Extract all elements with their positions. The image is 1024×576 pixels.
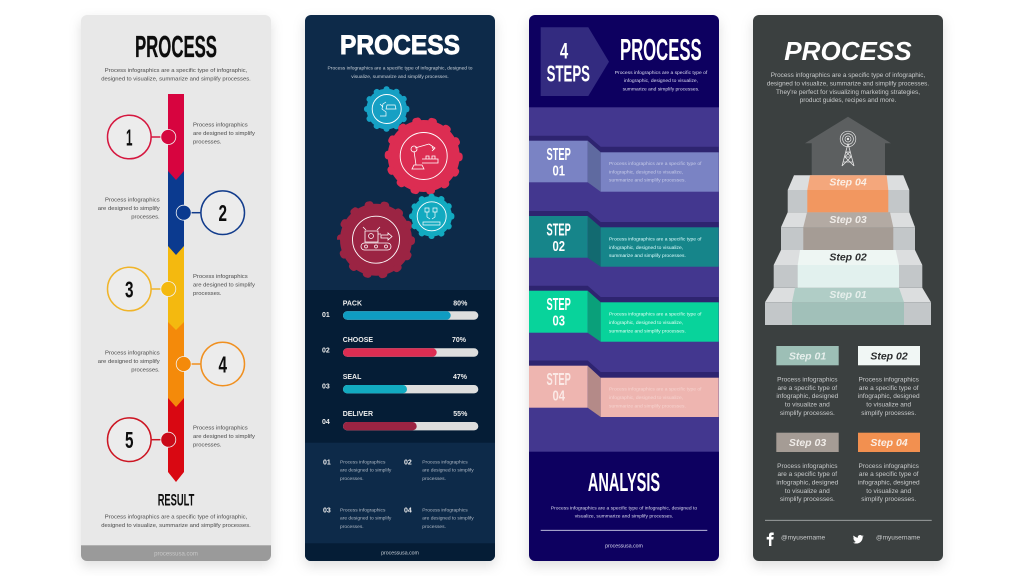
- note 02: 02: [404, 460, 412, 466]
- footer bar: processusa.com: [381, 550, 419, 556]
- progress bars section: [305, 290, 495, 443]
- step 5 marker: [108, 418, 176, 462]
- note 02: are designed to simplify: [422, 468, 474, 474]
- intro text: Process infographics are a specific type of: [615, 70, 708, 76]
- step 01 ribbon: summarize and simplify processes.: [609, 178, 686, 184]
- step 01 ribbon: 01: [552, 163, 565, 180]
- legend: step 01: are a specific type of: [777, 385, 837, 392]
- step 03 ribbon: infographic, designed to visualize,: [609, 320, 683, 326]
- title: PROCESS: [340, 30, 460, 60]
- tier: step 04: [788, 175, 909, 212]
- 4 steps arrow badge: 4: [560, 38, 569, 63]
- legend: step 03: Process infographics: [777, 463, 838, 470]
- step 01 ribbon: infographic, designed to visualize,: [609, 169, 683, 175]
- result text: Process infographics are a specific type of infographic,: [105, 514, 248, 520]
- icon: twitter: [853, 535, 864, 544]
- note 02: processes.: [422, 476, 446, 482]
- tier: step 01: [765, 288, 931, 325]
- step 01 ribbon: Process infographics are a specific type of: [609, 161, 702, 167]
- note 01: processes.: [340, 476, 364, 482]
- intro text: Process infographics are a specific type of infographic,: [105, 68, 248, 74]
- step 04 ribbon: Process infographics are a specific type of: [609, 387, 702, 393]
- step 5 text: processes.: [193, 442, 222, 448]
- intro text: designed to visualize, summarize and simplify processes.: [767, 80, 929, 87]
- step 4 marker: [176, 342, 244, 386]
- intro text: Process infographics are a specific type of infographic,: [771, 72, 925, 79]
- row: pack 80%: [322, 300, 478, 320]
- step 03 ribbon: Process infographics are a specific type of: [609, 312, 702, 318]
- step 5 text: are designed to simplify: [193, 434, 255, 440]
- row: deliver 55%: DELIVER: [343, 411, 373, 418]
- row: seal 47%: 47%: [453, 374, 468, 381]
- note 02: [404, 459, 474, 482]
- step 5 marker: 5: [125, 427, 134, 453]
- note 03: processes.: [340, 524, 364, 530]
- row: choose 70%: 02: [322, 348, 330, 354]
- facebook handle: @myusername: [781, 535, 826, 542]
- legend: step 02: infographic, designed: [858, 393, 920, 400]
- legend: step 01: Process infographics: [777, 376, 838, 383]
- panel: navy gears and progress bars: [305, 15, 495, 561]
- footer url: processusa.com: [605, 544, 643, 550]
- step 1 marker: [108, 115, 176, 159]
- row: seal 47%: [322, 374, 478, 393]
- legend: step 03: to visualize and: [785, 488, 830, 495]
- step 1 text: are designed to simplify: [193, 131, 255, 137]
- step 4 text: Process infographics: [105, 350, 160, 356]
- step 2 text: are designed to simplify: [98, 206, 160, 212]
- step 3 text: are designed to simplify: [193, 282, 255, 288]
- tier: step 02: Step 02: [829, 252, 867, 264]
- tier: step 02: [774, 250, 922, 288]
- tier: step 03: Step 03: [829, 214, 867, 226]
- step 02 ribbon: STEP: [547, 219, 571, 239]
- row: pack 80%: PACK: [343, 300, 362, 307]
- step 04 ribbon: 04: [552, 388, 565, 405]
- row: deliver 55%: 04: [322, 419, 330, 426]
- step 4 text: processes.: [131, 367, 160, 373]
- legend: step 04: are a specific type of: [859, 471, 919, 478]
- step 03 ribbon: 03: [552, 313, 565, 330]
- title: PROCESS: [620, 32, 702, 67]
- note 03: [323, 507, 392, 530]
- title: PROCESS: [135, 30, 217, 64]
- footer bar: [81, 545, 271, 561]
- note 04: are designed to simplify: [422, 516, 474, 522]
- legend: step 01: simplify processes.: [780, 410, 835, 417]
- note 04: processes.: [422, 524, 446, 530]
- intro text: product guides, recipes and more.: [800, 97, 897, 104]
- tier: step 01: Step 01: [829, 289, 867, 301]
- gear: conveyor, dark red: [340, 204, 412, 276]
- note 01: [323, 459, 392, 482]
- note 04: 04: [404, 508, 412, 514]
- legend: step 04: simplify processes.: [861, 496, 916, 503]
- step 03 ribbon: [529, 286, 719, 342]
- analysis heading: ANALYSIS: [588, 469, 660, 497]
- legend: step 04: [858, 433, 920, 503]
- row: choose 70%: CHOOSE: [343, 337, 373, 344]
- step 5 text: Process infographics: [193, 425, 248, 431]
- footer bar: processusa.com: [154, 552, 198, 558]
- step 3 text: processes.: [193, 291, 222, 297]
- intro text: They're perfect for visualizing marketing strategies,: [776, 89, 920, 96]
- row: deliver 55%: [322, 411, 478, 430]
- legend: step 03: Step 03: [789, 437, 826, 449]
- title: PROCESS: [784, 38, 912, 66]
- row: seal 47%: 03: [322, 384, 330, 390]
- step 2 text: processes.: [131, 215, 160, 221]
- step 03 ribbon: STEP: [547, 294, 571, 314]
- note 03: are designed to simplify: [340, 516, 392, 522]
- intro text: infographic, designed to visualize,: [624, 78, 698, 84]
- step 03 ribbon: summarize and simplify processes.: [609, 328, 686, 334]
- legend: step 02: to visualize and: [866, 401, 911, 408]
- note 04: [404, 507, 474, 530]
- legend: step 02: Process infographics: [859, 376, 920, 383]
- row: pack 80%: 01: [322, 312, 330, 319]
- icon: facebook: [767, 532, 774, 546]
- step 01 ribbon: [529, 136, 719, 192]
- legend: step 04: to visualize and: [866, 488, 911, 495]
- note 01: Process infographics: [340, 459, 386, 465]
- step 3 marker: [108, 267, 176, 311]
- step 02 ribbon: [529, 211, 719, 267]
- gear: robots, teal: [411, 196, 452, 237]
- intro text: designed to visualize, summarize and simplify processes.: [101, 76, 251, 82]
- tier: step 04: Step 04: [829, 176, 867, 188]
- legend: step 02: are a specific type of: [859, 385, 919, 392]
- legend: step 01: infographic, designed: [776, 393, 839, 400]
- tier: step 03: [781, 212, 915, 250]
- step 3 marker: 3: [125, 276, 134, 302]
- note 04: Process infographics: [422, 507, 468, 513]
- step 2 text: Process infographics: [105, 198, 160, 204]
- step 2 marker: 2: [218, 200, 227, 226]
- note 03: Process infographics: [340, 507, 386, 513]
- legend: step 02: Step 02: [870, 350, 908, 362]
- step 02 ribbon: Process infographics are a specific type of: [609, 237, 702, 243]
- panel: purple four steps: [529, 15, 719, 561]
- analysis text: visualize, summarize and simplify processes.: [575, 514, 673, 520]
- legend: step 02: [858, 346, 920, 417]
- row: pack 80%: 80%: [453, 300, 468, 307]
- step 04 ribbon: summarize and simplify processes.: [609, 404, 686, 410]
- note 01: are designed to simplify: [340, 468, 392, 474]
- step 2 marker: [176, 191, 244, 234]
- legend: step 01: Step 01: [789, 350, 826, 362]
- row: seal 47%: SEAL: [343, 374, 362, 381]
- legend: step 03: are a specific type of: [777, 471, 837, 478]
- 4 steps arrow badge: [541, 27, 609, 96]
- legend: step 04: infographic, designed: [858, 480, 920, 486]
- row: choose 70%: 70%: [452, 337, 467, 344]
- legend: step 04: Process infographics: [859, 463, 920, 470]
- step 4 marker: 4: [218, 351, 227, 377]
- 4 steps arrow badge: STEPS: [547, 61, 590, 87]
- legend: step 03: infographic, designed: [776, 480, 839, 486]
- step 02 ribbon: summarize and simplify processes.: [609, 253, 686, 259]
- step 01 ribbon: STEP: [547, 144, 571, 164]
- step 04 ribbon: infographic, designed to visualize,: [609, 395, 683, 401]
- step 1 text: Process infographics: [193, 122, 248, 128]
- legend: step 03: simplify processes.: [780, 496, 835, 503]
- intro text: visualize, summarize and simplify processes.: [351, 74, 449, 80]
- note 02: Process infographics: [422, 459, 468, 465]
- step 1 text: processes.: [193, 139, 222, 145]
- step 02 ribbon: 02: [552, 238, 565, 255]
- legend: step 03: [776, 433, 839, 503]
- panel: red timeline process: [81, 15, 271, 561]
- intro text: Process infographics are a specific type of infographic, designed to: [328, 65, 473, 71]
- step 02 ribbon: infographic, designed to visualize,: [609, 245, 683, 251]
- result text: designed to visualize, summarize and simplify processes.: [101, 523, 251, 529]
- result heading: RESULT: [158, 492, 194, 510]
- legend: step 01: to visualize and: [785, 401, 830, 408]
- panel: grey staircase: [753, 15, 943, 561]
- legend: step 01: [776, 346, 839, 417]
- analysis text: Process infographics are a specific type of infographic, designed to: [551, 505, 697, 511]
- note 01: 01: [323, 460, 331, 466]
- staircase: [765, 175, 931, 325]
- step 3 text: Process infographics: [193, 274, 248, 280]
- step 04 ribbon: [529, 360, 719, 417]
- note 03: 03: [323, 508, 331, 514]
- up arrow with tower icon: [805, 117, 891, 175]
- intro text: summarize and simplify processes.: [623, 86, 699, 92]
- legend: step 04: Step 04: [870, 437, 908, 449]
- step 4 text: are designed to simplify: [98, 359, 160, 365]
- step 04 ribbon: STEP: [547, 369, 571, 389]
- gear: robot hand, blue: [366, 89, 407, 129]
- twitter handle: @myusername: [876, 535, 921, 542]
- vertical arrow timeline: [168, 94, 184, 482]
- step 1 marker: 1: [126, 124, 133, 150]
- footer bar: [305, 543, 495, 561]
- gear: robot arm, red: [388, 120, 460, 192]
- legend: step 02: simplify processes.: [861, 410, 916, 417]
- row: deliver 55%: 55%: [453, 411, 468, 418]
- row: choose 70%: [322, 337, 478, 357]
